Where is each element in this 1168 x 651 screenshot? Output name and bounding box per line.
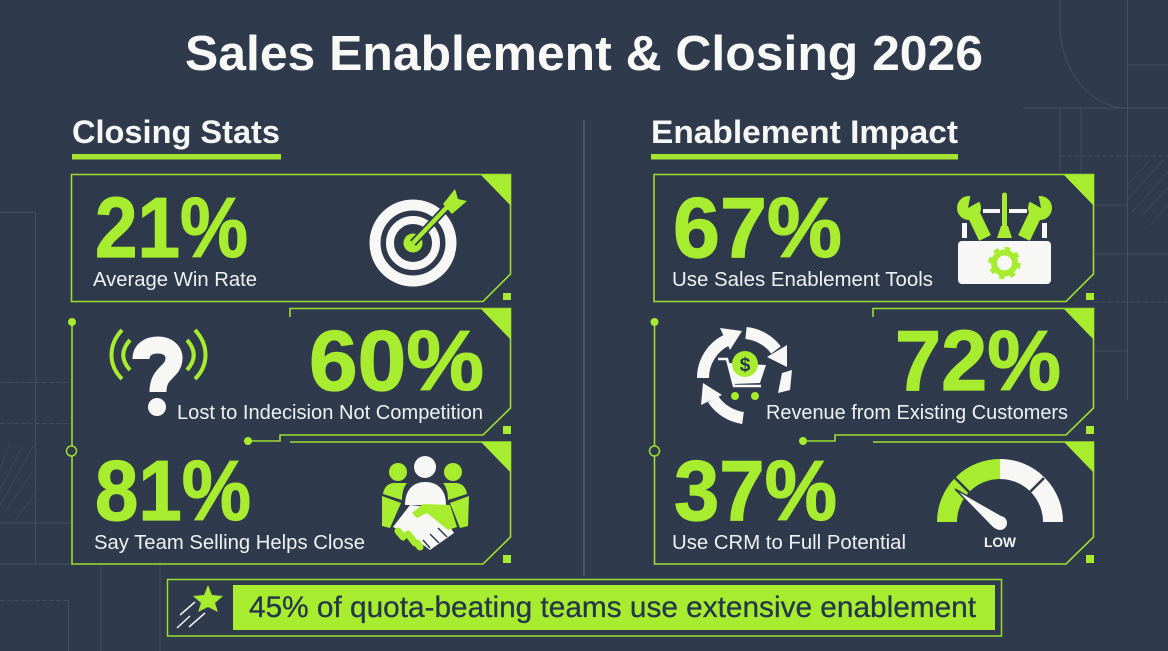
card: lost to indecision xyxy=(112,308,511,445)
card: existing customers: 72% xyxy=(895,314,1061,409)
card: average win rate: Average Win Rate xyxy=(93,269,257,291)
card: crm potential xyxy=(650,318,1094,564)
icon: gauge: LOW xyxy=(984,535,1016,550)
card: lost to indecision: 60% xyxy=(309,314,484,409)
card: team selling: Say Team Selling Helps Close xyxy=(94,532,365,554)
icon: target xyxy=(375,189,467,281)
icon: recurring revenue cart: $ xyxy=(740,355,751,376)
icon: shooting star xyxy=(177,585,223,628)
card: existing customers: Revenue from Existing Customers xyxy=(766,402,1068,424)
icon: team handshake xyxy=(382,456,469,550)
card: team selling: 81% xyxy=(95,444,251,539)
center divider xyxy=(583,120,585,576)
title: Sales Enablement & Closing 2026 xyxy=(185,27,983,81)
card: crm potential: Use CRM to Full Potential xyxy=(672,532,906,554)
card: enablement tools: Use Sales Enablement Tools xyxy=(672,269,933,291)
card: crm potential: 37% xyxy=(674,444,837,539)
callout: quota-beating banner xyxy=(168,580,1002,636)
card: enablement tools xyxy=(654,174,1094,302)
heading: enablement impact: Enablement Impact xyxy=(651,114,958,150)
card: lost to indecision: Lost to Indecision Not Competition xyxy=(177,402,483,424)
panel: enablement impact xyxy=(650,114,1094,564)
card: enablement tools: 67% xyxy=(673,181,842,276)
icon: question mark with waves xyxy=(112,330,206,416)
card: average win rate xyxy=(72,174,511,302)
card: team selling xyxy=(66,318,511,564)
panel: closing stats xyxy=(66,114,511,564)
card: average win rate: 21% xyxy=(95,181,248,276)
heading: closing stats: Closing Stats xyxy=(72,114,280,150)
card: existing customers xyxy=(701,308,1094,445)
callout: quota-beating banner: 45% of quota-beating teams use extensive enablement xyxy=(249,591,977,624)
icon: recurring revenue cart xyxy=(701,328,792,418)
icon: toolbox xyxy=(957,193,1052,284)
icon: gauge xyxy=(947,469,1053,550)
